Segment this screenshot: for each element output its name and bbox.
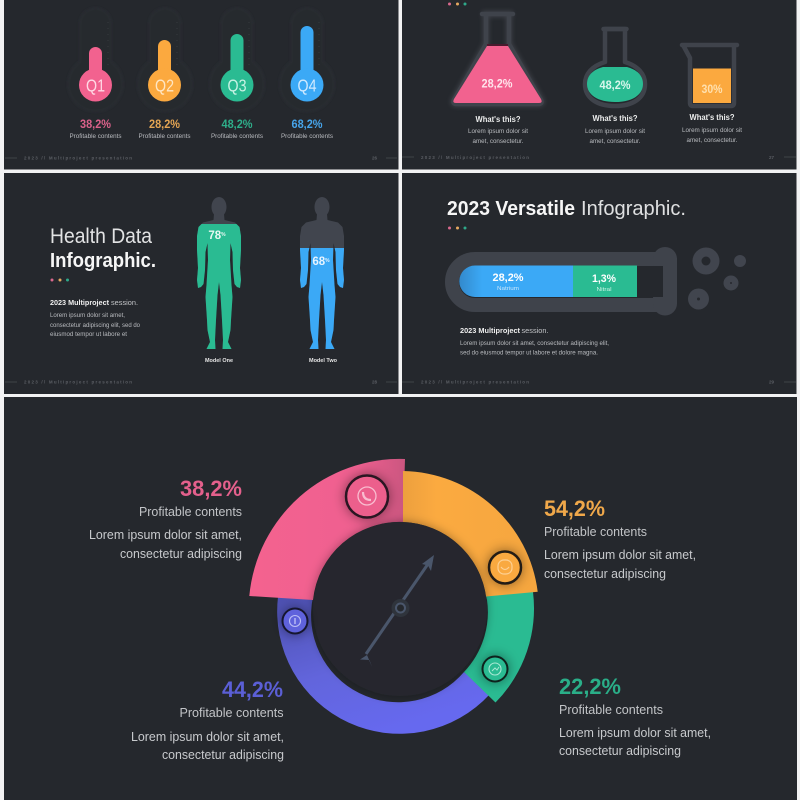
- accent dots: [448, 2, 466, 6]
- thermometer Q3: Profitable contents: [211, 133, 264, 140]
- beaker: [682, 45, 737, 106]
- figure: model one: [197, 197, 241, 362]
- figure: model one: %: [221, 232, 226, 238]
- beaker: 30%: [702, 82, 723, 96]
- footer: test tube: 2023 // Multiproject presentation: [421, 380, 529, 384]
- heading: [447, 198, 686, 220]
- heading: [50, 225, 156, 272]
- session text: [460, 326, 609, 356]
- panel: flasks: [402, 0, 796, 170]
- session text: 2023 Multiproject: [50, 298, 110, 307]
- heading: Infographic.: [50, 249, 156, 272]
- page number 28: 28: [372, 380, 378, 384]
- accent dots: [50, 278, 69, 282]
- session text: session.: [111, 298, 138, 307]
- icon: phone bubble: [346, 476, 388, 518]
- thermometer Q1: Q1: [86, 76, 105, 96]
- figure: model two: [300, 197, 344, 362]
- conical flask: 28,2%: [482, 76, 513, 90]
- thermometer Q3: Q3: [228, 76, 246, 96]
- session text: sed do eiusmod tempor ut labore et dolore magna.: [460, 350, 598, 356]
- thermometer Q2: 28,2%: [149, 117, 180, 131]
- thermometer Q1: 38,2%: [80, 117, 111, 131]
- session text: session.: [522, 326, 548, 335]
- thermometer Q2: Q2: [155, 76, 174, 96]
- panel: health data: [4, 173, 398, 394]
- page number 26: 26: [372, 156, 378, 160]
- needle: [360, 555, 434, 667]
- callout: 44,2%: [131, 677, 284, 762]
- caption: flask two: Lorem ipsum dolor sit: [585, 128, 645, 135]
- test tube: Natrium: [497, 286, 519, 292]
- callout: 54,2%: consectetur adipiscing: [544, 566, 666, 581]
- callout: 38,2%: consectetur adipiscing: [120, 546, 242, 561]
- caption: flask two: What's this?: [592, 114, 638, 123]
- donut chart: [249, 459, 538, 734]
- caption: flask one: amet, consectetur.: [472, 138, 524, 145]
- thermometer Q4: Q4: [298, 76, 317, 96]
- callout: 38,2%: 38,2%: [180, 476, 242, 501]
- test tube: 28,2%: [492, 272, 524, 284]
- heading: Infographic.: [581, 198, 686, 220]
- session text: consectetur adipiscing elit, sed do: [50, 322, 141, 329]
- thermometer Q2: [138, 8, 192, 140]
- callout: 38,2%: [89, 476, 242, 561]
- caption: beaker: Lorem ipsum dolor sit: [682, 127, 742, 134]
- thermometer Q4: Profitable contents: [281, 133, 334, 140]
- session text: Lorem ipsum dolor sit amet,: [50, 312, 125, 319]
- page number 27: 27: [769, 155, 775, 160]
- caption: beaker: [682, 113, 742, 144]
- caption: beaker: What's this?: [690, 113, 735, 122]
- inner hole: [313, 522, 487, 696]
- caption: flask one: Lorem ipsum dolor sit: [468, 128, 528, 135]
- figure: model two: Model Two: [309, 358, 338, 364]
- segment: purple: [277, 597, 490, 734]
- caption: beaker: amet, consectetur.: [686, 137, 738, 144]
- figure: model two: %: [325, 258, 330, 264]
- footer: health data: 2023 // Multiproject presentation: [24, 380, 132, 384]
- session text: 2023 Multiproject: [460, 326, 521, 335]
- callout: 54,2%: 54,2%: [544, 496, 605, 521]
- accent dots: [448, 226, 466, 230]
- heading: Health Data: [50, 225, 152, 248]
- panel: thermometers: [4, 0, 398, 170]
- footer: thermometers: 2023 // Multiproject presentation: [24, 156, 132, 160]
- footer: flasks: 2023 // Multiproject presentation: [421, 155, 529, 160]
- thermometer Q3: 48,2%: [222, 117, 253, 131]
- callout: 44,2%: Profitable contents: [180, 706, 284, 720]
- segment: pink: [249, 459, 405, 600]
- panel: test tube: [402, 173, 796, 394]
- icon: smile bubble: [489, 552, 521, 584]
- page number 29: 29: [769, 380, 775, 384]
- heading: 2023 Versatile: [447, 198, 575, 220]
- callout: 44,2%: Lorem ipsum dolor sit amet,: [131, 729, 284, 744]
- callout: 22,2%: Profitable contents: [559, 703, 663, 717]
- segment: green: [464, 592, 534, 702]
- figure: model one: Model One: [205, 358, 233, 364]
- callout: 22,2%: [559, 674, 711, 758]
- callout: 22,2%: Lorem ipsum dolor sit amet,: [559, 725, 711, 740]
- session text: eiusmod tempor ut labore et: [50, 331, 127, 338]
- bubbles: [688, 248, 746, 310]
- icon: info bubble: [282, 608, 308, 634]
- test tube: Nitral: [596, 287, 612, 293]
- callout: 54,2%: Profitable contents: [544, 525, 647, 539]
- panel: donut chart: [4, 397, 797, 800]
- callout: 44,2%: 44,2%: [222, 677, 283, 702]
- thermometer Q1: Profitable contents: [70, 133, 122, 140]
- figure: model one: 78: [208, 230, 221, 242]
- icon: chat bubble: [482, 656, 508, 682]
- callout: 22,2%: 22,2%: [559, 674, 621, 699]
- thermometer Q4: 68,2%: [292, 117, 323, 131]
- callout: 44,2%: consectetur adipiscing: [162, 747, 284, 762]
- test tube: [452, 247, 677, 316]
- thermometer Q4: [280, 8, 334, 140]
- round flask: [585, 29, 645, 106]
- caption: flask one: [468, 115, 528, 145]
- figure: model two: 68: [312, 256, 325, 268]
- callout: 54,2%: Lorem ipsum dolor sit amet,: [544, 547, 696, 562]
- callout: 22,2%: consectetur adipiscing: [559, 743, 681, 758]
- caption: flask one: What's this?: [476, 115, 521, 124]
- caption: flask two: [585, 114, 645, 145]
- round flask: 48,2%: [600, 78, 631, 92]
- conical flask: [453, 14, 542, 104]
- session text: Lorem ipsum dolor sit amet, consectetur adipiscing elit,: [460, 340, 609, 347]
- thermometer Q3: [210, 9, 264, 140]
- callout: 54,2%: [544, 496, 696, 581]
- test tube: 1,3%: [592, 273, 616, 285]
- callout: 38,2%: Lorem ipsum dolor sit amet,: [89, 527, 242, 542]
- caption: flask two: amet, consectetur.: [590, 138, 641, 145]
- callout: 38,2%: Profitable contents: [139, 505, 242, 519]
- session text: [50, 298, 141, 338]
- thermometer Q2: Profitable contents: [138, 133, 191, 140]
- segment: orange: [403, 471, 538, 596]
- thermometer Q1: [68, 8, 122, 140]
